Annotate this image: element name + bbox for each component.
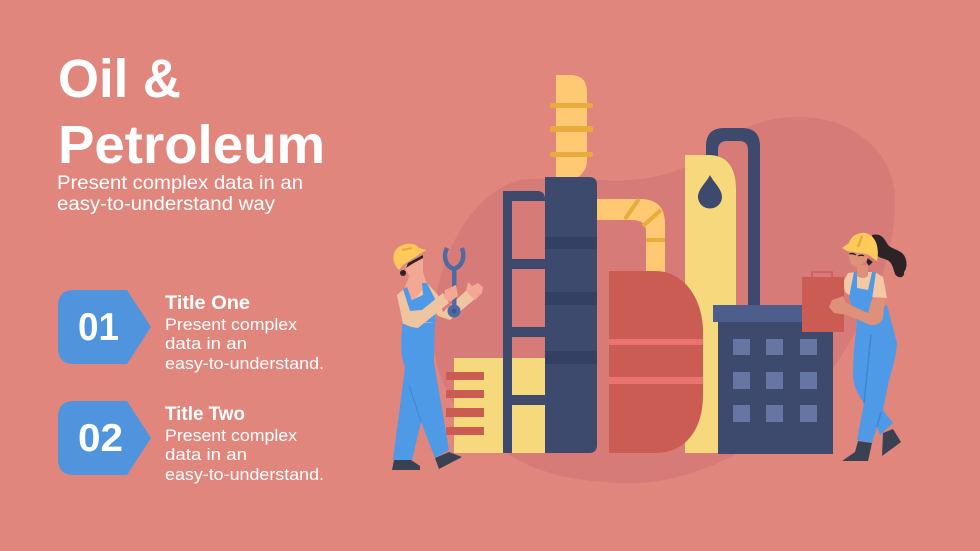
vent slats (446, 372, 484, 435)
worker with clipboard (802, 233, 907, 461)
navy tower (545, 177, 597, 453)
red tank (609, 271, 703, 453)
yellow block (454, 358, 545, 453)
ponytail (872, 235, 907, 277)
far arm (427, 283, 476, 320)
shirt (843, 272, 887, 298)
neck and head (404, 272, 427, 300)
item two text: Present complex (165, 426, 298, 445)
subtitle (57, 173, 303, 215)
icon: oil drop (698, 175, 722, 209)
arm and hand (829, 296, 885, 325)
shoes (392, 460, 420, 470)
item one text (165, 293, 324, 373)
control building (713, 305, 833, 454)
refinery illustration (446, 75, 833, 454)
item two text: easy-to-understand. (165, 465, 324, 484)
badge 02: 02 (78, 417, 123, 460)
near arm (397, 290, 449, 328)
item two text: data in an (165, 445, 247, 464)
curved pipe (597, 199, 665, 272)
title: Oil & (58, 49, 181, 109)
chimney (550, 75, 593, 178)
overalls legs (393, 316, 449, 460)
item two text (165, 404, 324, 484)
boots (842, 441, 872, 461)
near hand (444, 285, 458, 302)
item one text: Title One (165, 293, 250, 314)
item two text: Title Two (165, 404, 245, 425)
title (58, 49, 325, 175)
hard hat (393, 244, 426, 270)
worker with wrench (392, 244, 483, 470)
icon: wrench (445, 248, 463, 318)
clipboard (802, 272, 844, 332)
hard hat (842, 233, 878, 261)
torso shirt (397, 283, 436, 324)
subtitle: Present complex data in an (57, 173, 303, 194)
badge 01 (58, 290, 151, 364)
bib (403, 283, 436, 322)
navy riser pipe (706, 128, 760, 310)
item one text: easy-to-understand. (165, 354, 324, 373)
ladder (503, 191, 545, 453)
badge 02 (58, 401, 151, 475)
title: Petroleum (58, 115, 325, 175)
subtitle: easy-to-understand way (57, 194, 276, 215)
overalls (849, 272, 897, 443)
neck and head (857, 265, 868, 278)
item one text: Present complex (165, 315, 298, 334)
yellow column (685, 155, 736, 453)
background blob (433, 117, 895, 483)
badge 01: 01 (78, 306, 119, 349)
item one text: data in an (165, 334, 247, 353)
far hand (466, 282, 483, 300)
